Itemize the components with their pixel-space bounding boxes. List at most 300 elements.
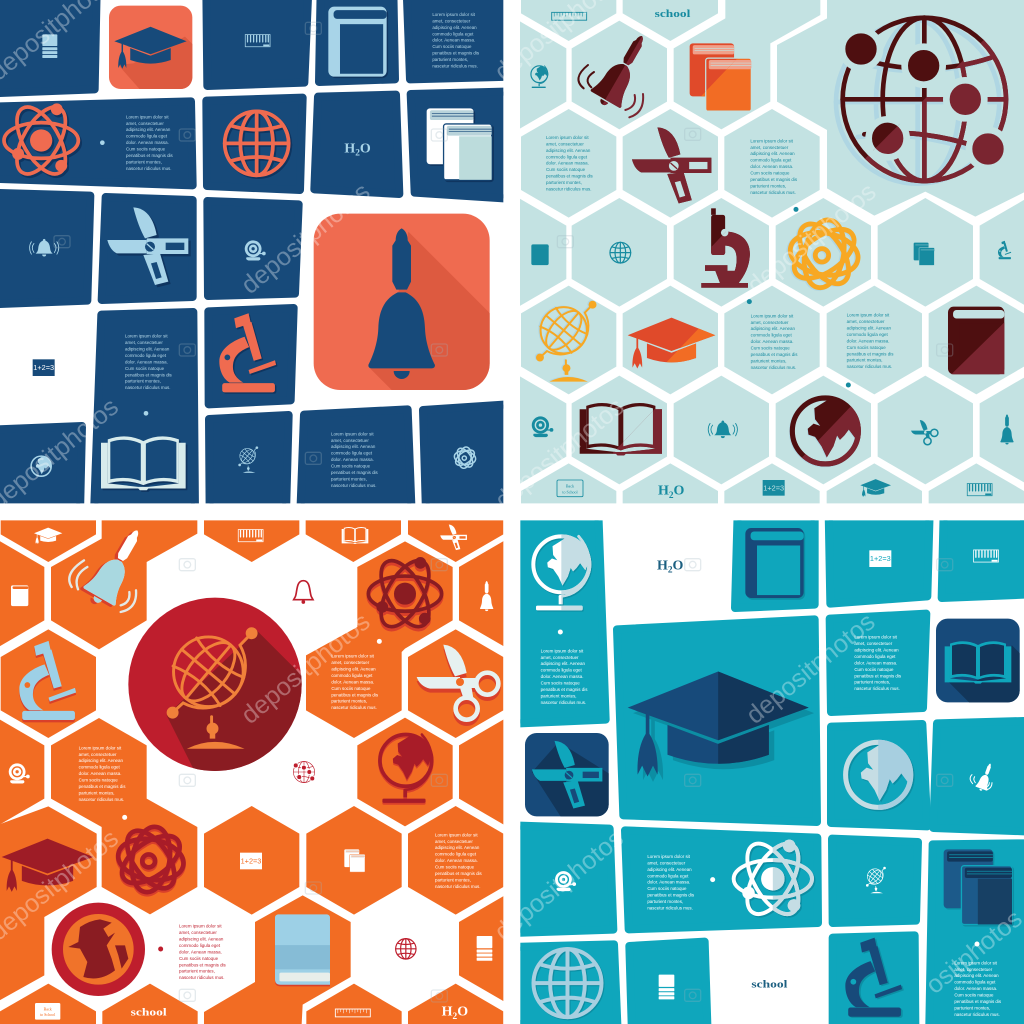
text: lorem block left: adipiscing elit. Aenean — [546, 148, 591, 153]
text: lorem block left: dolor. Aenean massa. — [541, 674, 583, 679]
text: lorem block centre: penatibus et magnis dis — [750, 177, 798, 182]
icon: big graduation cap — [628, 671, 814, 782]
text: lorem block centre: parturient montes, — [647, 899, 683, 904]
text: lorem block atom tile: parturient montes, — [126, 159, 162, 164]
icon: ruler — [335, 1009, 370, 1017]
tile: text and open book — [94, 312, 195, 513]
hex: school — [102, 984, 198, 1024]
hex: small books — [878, 198, 973, 307]
text: lorem block top right: Lorem ipsum dolor sit — [432, 12, 476, 17]
icon: small globe on stand — [237, 445, 258, 473]
watermark: repeated stock-photo text: depositphotos — [236, 608, 376, 730]
hex: H2O — [623, 463, 718, 572]
hex: earth on stand — [357, 718, 453, 826]
text: lorem block lower right: amet, consectetuer — [847, 319, 885, 324]
text: lorem block lower right: parturient montes, — [847, 358, 883, 363]
icon: back to school ticket — [35, 1003, 60, 1020]
tile: alarm — [207, 201, 299, 296]
tile: text and atom — [625, 830, 818, 929]
text: lorem block centre: dolor. Aenean massa. — [750, 164, 793, 169]
text: lorem block centre: Lorem ipsum dolor sit — [750, 138, 794, 143]
label: school: school — [131, 1007, 167, 1018]
text: lorem block upper right: adipiscing elit. Aenean — [854, 648, 899, 653]
hex: hand bell — [572, 21, 667, 129]
hex: small scissors — [878, 376, 973, 484]
icon: small wire globe — [610, 242, 631, 263]
icon: red atom — [368, 553, 442, 637]
text: lorem block atom tile: nascetur ridiculus mus. — [126, 166, 172, 171]
text: lorem block upper right: parturient montes, — [854, 680, 890, 685]
tile: board — [829, 512, 930, 604]
hex: text right — [408, 806, 503, 915]
text: lorem block upper right: Cum sociis natoque — [854, 667, 894, 672]
text: lorem block bottom: amet, consectetuer — [331, 438, 369, 443]
icon: alarm bell — [555, 871, 576, 891]
icon: hand bell with sound arcs — [578, 27, 657, 117]
text: lorem block right: Cum sociis natoque — [435, 864, 475, 869]
text: lorem block left: Cum sociis natoque — [79, 777, 118, 782]
text: lorem block centre: Cum sociis natoque — [647, 886, 687, 891]
icon: small globe on stand — [864, 866, 886, 893]
text: lorem block red: Lorem ipsum dolor sit — [179, 924, 222, 929]
tile: text top right — [407, 0, 513, 79]
panel: orange hexagon infographic — [0, 453, 554, 1024]
text: lorem block bottom: parturient montes, — [331, 476, 367, 481]
tile: navy open book — [936, 619, 1022, 705]
icon: chalkboard: 1+2=3 — [241, 856, 261, 865]
text: lorem block bottom right: nascetur ridiculus mus. — [954, 1012, 1000, 1017]
text: lorem block red: amet, consectetuer — [179, 930, 217, 935]
text: lorem block red: Cum sociis natoque — [179, 956, 219, 961]
text: lorem block top right: adipiscing elit. Aenean — [432, 25, 477, 30]
text: lorem block red: adipiscing elit. Aenean — [179, 937, 224, 942]
hex: ticket — [0, 984, 96, 1024]
icon: small book — [531, 244, 549, 265]
tile: book — [735, 512, 815, 608]
hex: alarm — [471, 376, 566, 484]
tile: globe — [512, 944, 617, 1024]
hex: text lower — [724, 286, 820, 394]
text: lorem block upper right: parturient montes, — [331, 699, 367, 704]
text: lorem block red: nascetur ridiculus mus. — [179, 975, 225, 980]
hex: open book — [572, 376, 667, 484]
text: lorem block bottom: Lorem ipsum dolor sit — [331, 431, 374, 436]
tile: alarm — [512, 825, 613, 933]
watermark cameras — [179, 559, 447, 1002]
hex: cap merged left — [0, 806, 97, 1002]
text: lorem block centre: Cum sociis natoque — [750, 170, 790, 175]
icon: bell outline — [294, 581, 313, 603]
hex: book merged — [204, 895, 351, 1024]
icon: small book — [11, 585, 28, 606]
dot — [793, 207, 798, 212]
icon: blue book — [275, 914, 330, 986]
hex: small microscope — [980, 198, 1024, 307]
watermark: repeated stock-photo text: depositphotos — [741, 608, 881, 730]
text: lorem block bottom right: dolor. Aenean massa. — [954, 986, 997, 991]
hex: scissors — [623, 109, 718, 218]
tile: earth — [831, 724, 927, 826]
text: lorem block lower: nascetur ridiculus mus. — [751, 365, 796, 370]
icon: globe — [225, 111, 290, 177]
hex: scissors small — [408, 453, 503, 562]
text: lorem block left: commodo ligula eget — [541, 668, 583, 673]
icon: server — [659, 975, 674, 999]
text: lorem block bottom: penatibus et magnis dis — [331, 470, 379, 475]
text: lorem block centre: amet, consectetuer — [647, 860, 686, 865]
tile: navy scissors — [525, 733, 612, 819]
icon: scissors — [417, 645, 498, 724]
hex: ruler — [306, 984, 402, 1024]
hex: small cap — [827, 463, 922, 572]
tile: small globe — [832, 839, 918, 923]
icon: earth on stand — [533, 536, 591, 612]
text: lorem block left: nascetur ridiculus mus. — [541, 700, 586, 705]
text: lorem block upper right: commodo ligula eget — [854, 654, 896, 659]
text: lorem block centre: commodo ligula eget — [750, 158, 792, 163]
text: lorem block bottom right: commodo ligula eget — [954, 980, 996, 985]
icon: back to school ticket: Back — [44, 1006, 52, 1011]
icon: small books — [914, 243, 934, 265]
text: lorem block lower: commodo ligula eget — [751, 333, 793, 338]
dot — [122, 815, 127, 820]
tile: scissors — [102, 197, 193, 300]
icon: keyboard — [245, 35, 270, 47]
panel: teal rounded-tile infographic — [512, 512, 1024, 1024]
tile: small globe — [209, 415, 289, 513]
label: school: school — [751, 980, 787, 991]
hex: school — [623, 0, 718, 41]
hex: globe on stand — [521, 286, 616, 394]
tile: ringing bell — [0, 193, 90, 304]
text: lorem block left: Cum sociis natoque — [546, 167, 586, 172]
icon: microscope — [845, 938, 904, 1018]
icon: keyboard — [974, 550, 998, 562]
icon: open book — [101, 436, 187, 492]
icon: earth — [792, 397, 860, 465]
text: lorem block lower: penatibus et magnis dis — [751, 352, 798, 357]
icon: atom — [4, 99, 80, 184]
text: lorem block left: dolor. Aenean massa. — [79, 771, 121, 776]
text: lorem block lower: amet, consectetuer — [751, 320, 789, 325]
text: lorem block centre: parturient montes, — [750, 183, 786, 188]
tile: microscope — [208, 308, 294, 404]
icon: alarm bell — [532, 416, 553, 437]
hex: microscope — [674, 198, 769, 307]
text: lorem block left: parturient montes, — [541, 693, 577, 698]
icon: chalkboard — [33, 359, 55, 376]
tile: text upper right — [830, 614, 926, 712]
text: lorem block red: dolor. Aenean massa. — [179, 949, 222, 954]
panel: navy rounded-tile infographic — [0, 0, 513, 513]
text: lorem block right: nascetur ridiculus mus. — [435, 884, 481, 889]
text: lorem block top right: nascetur ridiculus mus. — [432, 63, 478, 68]
dot — [158, 946, 163, 951]
hex: text lower right — [827, 286, 922, 394]
icon: microscope — [701, 208, 750, 288]
label: H2O: O — [360, 141, 371, 156]
text: lorem block centre: dolor. Aenean massa. — [647, 880, 690, 885]
text: lorem block left: amet, consectetuer — [546, 141, 584, 146]
text: lorem block lower right: nascetur ridiculus mus. — [847, 364, 892, 369]
hex: alarm — [0, 718, 44, 826]
icon: scissors — [107, 207, 191, 287]
hex: small bell — [459, 539, 554, 648]
hex: open book — [306, 453, 401, 562]
text: lorem block lower right: Lorem ipsum dolor sit — [847, 313, 890, 318]
hex: large globe merged — [777, 0, 1024, 217]
label: H2O: 2 — [668, 566, 673, 576]
text: lorem block left: parturient montes, — [546, 180, 582, 185]
text: lorem block atom tile: Lorem ipsum dolor sit — [126, 114, 169, 119]
hex: earth — [776, 376, 871, 484]
text: lorem block centre: commodo ligula eget — [125, 353, 167, 358]
hex: board — [724, 463, 820, 572]
dot — [558, 629, 563, 634]
icon: small scissors — [911, 420, 938, 445]
watermark: repeated stock-photo text: depositphotos — [489, 824, 629, 946]
text: lorem block centre: penatibus et magnis dis — [647, 893, 695, 898]
text: lorem block centre: nascetur ridiculus mus. — [125, 385, 171, 390]
text: lorem block left: Lorem ipsum dolor sit — [546, 135, 589, 140]
icon: open book — [580, 403, 662, 455]
icon: tangled atom — [784, 216, 862, 293]
icon: microscope — [219, 313, 278, 394]
text: lorem block centre: adipiscing elit. Aenean — [125, 347, 170, 352]
text: lorem block left: adipiscing elit. Aenean — [79, 758, 124, 763]
icon: graduation cap — [2, 839, 93, 892]
text: lorem block centre: adipiscing elit. Aenean — [750, 151, 795, 156]
text: lorem block centre: parturient montes, — [125, 379, 161, 384]
text: lorem block atom tile: dolor. Aenean massa. — [126, 140, 169, 145]
watermark: repeated stock-photo text: depositphotos — [236, 178, 376, 300]
text: lorem block centre: amet, consectetuer — [750, 145, 789, 150]
icon: small hand bell — [480, 581, 493, 611]
icon: books — [944, 849, 1013, 926]
text: lorem block upper right: nascetur ridiculus mus. — [331, 705, 377, 710]
hex: ringing bell — [674, 376, 769, 484]
tile: ruler — [206, 0, 308, 86]
tile: small bell — [933, 721, 1024, 831]
watermark: repeated stock-photo text: depositphotos — [742, 178, 882, 300]
icon: back to school ticket: Back — [566, 483, 574, 488]
icon: books — [427, 108, 493, 181]
label: H2O: O — [674, 484, 685, 499]
icon: small microscope — [998, 241, 1011, 259]
text: lorem block top right: parturient montes, — [432, 57, 468, 62]
dot — [747, 299, 752, 304]
hex: small globe — [520, 22, 566, 128]
text: lorem block right: dolor. Aenean massa. — [435, 858, 478, 863]
text: lorem block upper right: amet, consectetuer — [331, 660, 370, 665]
icon: small books — [344, 849, 365, 872]
icon: globe — [534, 949, 603, 1018]
icon: earth — [846, 742, 914, 809]
watermark cameras — [54, 22, 447, 464]
icon: small atom — [453, 446, 477, 470]
icon: server stack — [42, 34, 57, 58]
hex: ruler — [521, 0, 616, 41]
icon: atom — [734, 836, 814, 924]
text: lorem block top right: dolor. Aenean massa. — [432, 38, 475, 43]
label: H2O: H — [657, 558, 668, 573]
icon: chalkboard: 1+2=3 — [33, 363, 54, 372]
tile: microscope — [833, 935, 915, 1024]
icon: small cap — [34, 528, 62, 544]
tile: keyboard — [942, 512, 1024, 598]
text: lorem block atom tile: amet, consectetuer — [126, 121, 164, 126]
icon: small dotted globe — [293, 761, 315, 783]
hex: atom and text merged — [306, 541, 453, 738]
hex: small server — [459, 894, 554, 1003]
icon: earth — [31, 456, 52, 476]
text: lorem block lower: parturient montes, — [751, 358, 787, 363]
hex: keyboard — [929, 463, 1024, 572]
text: lorem block right: commodo ligula eget — [435, 852, 477, 857]
hex: keyboard — [204, 453, 299, 562]
label: H2O: 2 — [669, 491, 674, 501]
icon: chalkboard: 1+2=3 — [870, 554, 891, 563]
text: lorem block centre: commodo ligula eget — [647, 873, 689, 878]
text: lorem block left: penatibus et magnis dis — [546, 174, 594, 179]
dot — [100, 140, 105, 145]
text: lorem block centre: amet, consectetuer — [125, 340, 163, 345]
icon: books — [690, 43, 751, 111]
hex: small books — [306, 806, 402, 915]
text: lorem block bottom right: penatibus et magnis dis — [954, 999, 1002, 1004]
tile: small atom — [419, 400, 504, 504]
text: lorem block centre: penatibus et magnis dis — [125, 372, 173, 377]
tile: books — [411, 91, 513, 199]
hex: cap — [623, 286, 718, 394]
dot — [377, 639, 382, 644]
tile: globe and text — [512, 512, 606, 724]
text: lorem block bottom right: Lorem ipsum dolor sit — [954, 960, 998, 965]
icon: small hand bell — [1000, 414, 1014, 444]
hex: text left — [521, 109, 616, 218]
dot — [710, 877, 715, 882]
text: lorem block lower: Lorem ipsum dolor sit — [751, 313, 794, 318]
tile: server — [629, 942, 707, 1024]
icon: book — [745, 528, 805, 600]
text: lorem block top right: amet, consectetuer — [432, 18, 471, 23]
tile: books and text — [929, 843, 1024, 1024]
hex: text centre — [724, 109, 820, 218]
hex: hand bell merged — [51, 512, 197, 649]
text: lorem block lower right: commodo ligula eget — [847, 332, 889, 337]
icon: chalkboard — [763, 480, 785, 496]
hex: atom — [776, 198, 871, 307]
text: lorem block left: penatibus et magnis dis — [541, 687, 588, 692]
tile: book — [319, 0, 395, 82]
tile: atom and text — [0, 101, 193, 185]
icon: chalkboard: 1+2=3 — [763, 483, 784, 492]
text: lorem block right: penatibus et magnis dis — [435, 871, 483, 876]
text: lorem block left: Lorem ipsum dolor sit — [541, 648, 584, 653]
text: lorem block lower right: penatibus et magnis dis — [847, 351, 894, 356]
text: lorem block red: penatibus et magnis dis — [179, 962, 227, 967]
hex: small cap — [1, 453, 96, 562]
icon: graduation cap — [628, 318, 715, 369]
watermark: repeated stock-photo text: depositphotos — [490, 393, 630, 515]
icon: alarm bell — [9, 763, 30, 783]
icon: earth disc — [52, 903, 145, 996]
icon: large globe with nodes — [836, 18, 1007, 184]
text: lorem block centre: dolor. Aenean massa. — [125, 359, 168, 364]
text: lorem block left: adipiscing elit. Aenean — [541, 661, 586, 666]
tile: H2O — [314, 95, 399, 194]
icon: tangled atom — [114, 823, 188, 899]
text: lorem block left: Lorem ipsum dolor sit — [79, 745, 122, 750]
text: lorem block centre: nascetur ridiculus mus. — [750, 190, 796, 195]
text: lorem block upper right: penatibus et magnis dis — [854, 673, 902, 678]
label: H2O: 2 — [453, 1012, 458, 1022]
icon: hand bell with sound arcs — [69, 520, 153, 614]
text: lorem block bottom right: adipiscing elit. Aenean — [954, 973, 999, 978]
icon: chalkboard — [869, 550, 891, 567]
icon: chalkboard — [240, 853, 262, 869]
text: lorem block centre: Lorem ipsum dolor sit — [647, 854, 691, 859]
hex: book — [929, 286, 1024, 394]
icon: keyboard — [967, 484, 992, 496]
text: lorem block right: adipiscing elit. Aenean — [435, 845, 480, 850]
hex: microscope — [1, 629, 96, 738]
text: lorem block right: parturient montes, — [435, 877, 471, 882]
hex: small globe — [572, 198, 667, 307]
label: H2O: H — [442, 1005, 453, 1020]
text: lorem block upper right: adipiscing elit. Aenean — [331, 667, 376, 672]
icon: keyboard — [238, 530, 263, 542]
hex: text and atom merged — [51, 718, 197, 914]
text: lorem block bottom right: amet, consectetuer — [954, 967, 993, 972]
text: lorem block lower right: adipiscing elit. Aenean — [847, 326, 892, 331]
text: lorem block upper right: nascetur ridiculus mus. — [854, 686, 900, 691]
tile: globe — [206, 98, 303, 190]
label: H2O: H — [658, 484, 669, 499]
text: lorem block left: nascetur ridiculus mus. — [79, 797, 124, 802]
icon: small open book — [342, 527, 368, 544]
text: lorem block bottom: adipiscing elit. Aenean — [331, 444, 376, 449]
text: lorem block left: nascetur ridiculus mus. — [546, 186, 592, 191]
text: lorem block red: commodo ligula eget — [179, 943, 221, 948]
text: lorem block top right: penatibus et magnis dis — [432, 51, 480, 56]
text: lorem block bottom right: parturient montes, — [954, 1005, 990, 1010]
tile: top left — [0, 0, 97, 93]
icon: ruler — [552, 12, 587, 20]
text: lorem block red: parturient montes, — [179, 969, 215, 974]
text: lorem block lower: Cum sociis natoque — [751, 345, 790, 350]
icon: ringing bell — [30, 239, 59, 256]
hex: ticket — [521, 463, 616, 572]
icon: book — [948, 307, 1004, 374]
icon: alarm bell — [245, 240, 266, 260]
text: lorem block right: Lorem ipsum dolor sit — [435, 832, 478, 837]
icon: book — [328, 7, 388, 78]
text: lorem block atom tile: penatibus et magnis dis — [126, 153, 174, 158]
label: H2O: O — [673, 558, 684, 573]
panel: pale hexagon infographic — [498, 0, 1024, 504]
text: lorem block upper right: Cum sociis natoque — [331, 686, 371, 691]
text: lorem block upper right: Lorem ipsum dolor sit — [854, 635, 898, 640]
text: lorem block left: commodo ligula eget — [79, 765, 121, 770]
text: lorem block left: dolor. Aenean massa. — [546, 161, 589, 166]
icon: small red globe — [396, 939, 416, 959]
hex: small bell — [980, 376, 1024, 484]
icon: microscope — [19, 641, 76, 722]
watermark cameras — [685, 559, 953, 1001]
text: lorem block centre: Lorem ipsum dolor sit — [125, 334, 168, 339]
icon: globe disc with long shadow — [128, 598, 307, 779]
